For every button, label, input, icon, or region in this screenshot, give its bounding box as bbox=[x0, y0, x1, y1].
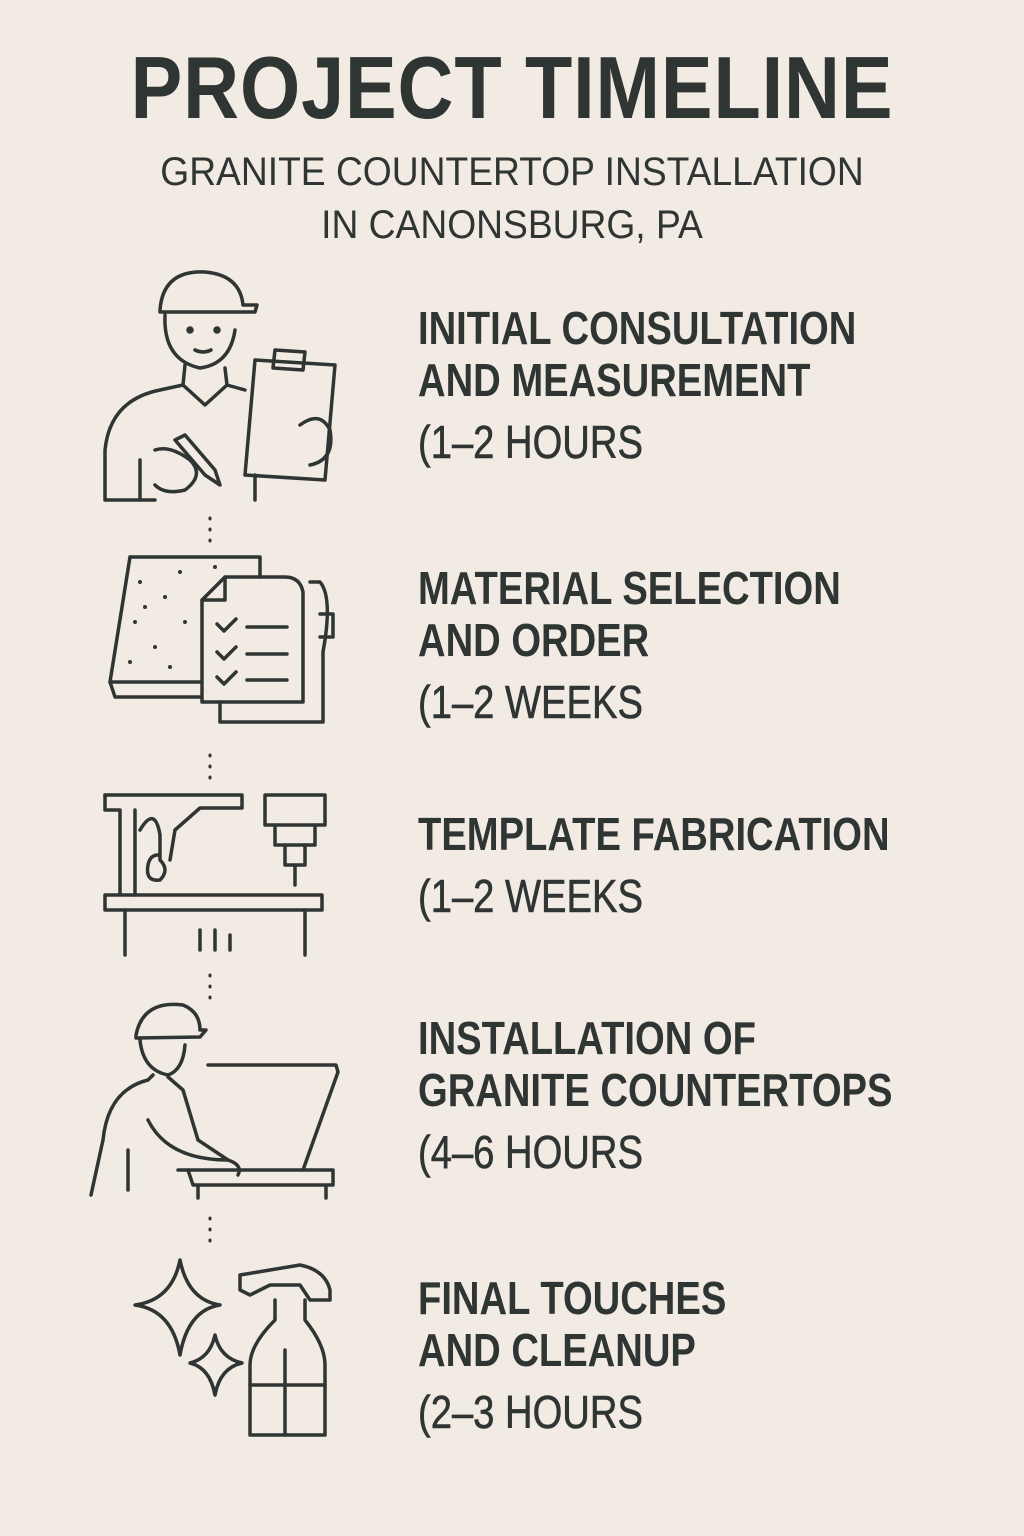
step 1 text: AND MEASUREMENT bbox=[418, 354, 810, 406]
step 4 text: GRANITE COUNTERTOPS bbox=[418, 1064, 892, 1116]
title: PROJECT TIMELINE bbox=[131, 38, 893, 137]
step 2 text: AND ORDER bbox=[418, 614, 649, 666]
connector 2 bbox=[208, 754, 212, 780]
step 5 text: FINAL TOUCHES bbox=[418, 1272, 726, 1324]
subtitle: IN CANONSBURG, PA bbox=[321, 203, 703, 247]
step 3 text: (1–2 WEEKS bbox=[418, 870, 643, 922]
step 2 text: (1–2 WEEKS bbox=[418, 676, 643, 728]
step 4 text: INSTALLATION OF bbox=[418, 1012, 756, 1064]
step 1 text bbox=[418, 302, 856, 468]
icon: worker with clipboard bbox=[103, 270, 337, 502]
step 4 text: (4–6 HOURS bbox=[418, 1126, 643, 1178]
connector 3 bbox=[208, 974, 212, 1000]
icon: fabrication machine bbox=[103, 793, 327, 957]
step 2 text bbox=[418, 562, 841, 728]
step 1 text: INITIAL CONSULTATION bbox=[418, 302, 856, 354]
step 2 text: MATERIAL SELECTION bbox=[418, 562, 841, 614]
step 5 text bbox=[418, 1272, 726, 1438]
step 5 text: AND CLEANUP bbox=[418, 1324, 696, 1376]
step 1 text: (1–2 HOURS bbox=[418, 416, 643, 468]
subtitle: GRANITE COUNTERTOP INSTALLATION bbox=[160, 150, 864, 194]
subtitle bbox=[160, 150, 864, 247]
icon: installer with countertop bbox=[89, 1002, 340, 1200]
step 3 text: TEMPLATE FABRICATION bbox=[418, 808, 890, 860]
icon: granite slab and checklist bbox=[108, 555, 335, 724]
connector 4 bbox=[208, 1216, 212, 1242]
step 5 text: (2–3 HOURS bbox=[418, 1386, 643, 1438]
step 4 text bbox=[418, 1012, 892, 1178]
step 3 text bbox=[418, 808, 890, 922]
connector 1 bbox=[208, 516, 212, 542]
icon: sparkles and spray bottle bbox=[133, 1258, 332, 1437]
